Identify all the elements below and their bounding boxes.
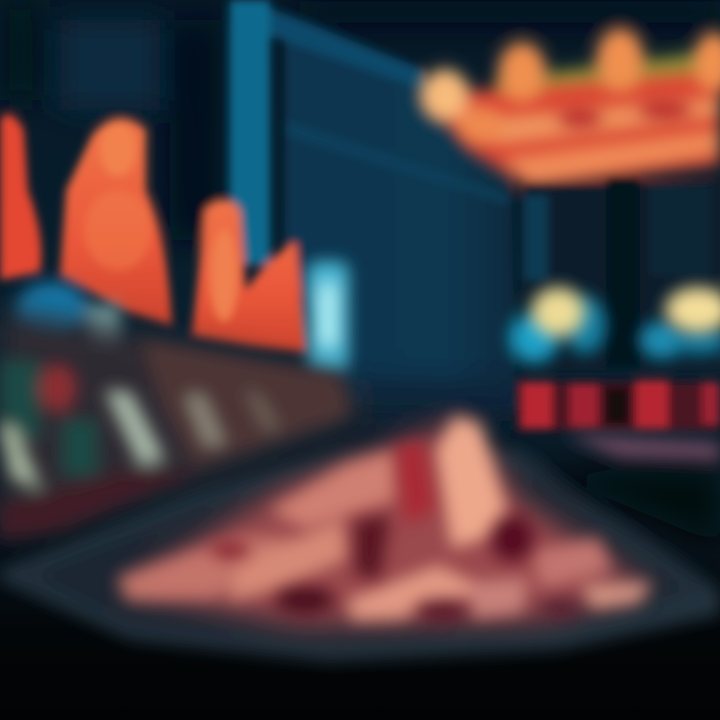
machine base [565,434,720,464]
back wall panel [285,34,515,410]
right floor shadow [540,470,720,545]
marquee bulbs [421,28,720,143]
red reels [518,380,720,430]
wall fading base [350,380,515,430]
red flame towers [0,114,306,352]
marquee crown [425,50,720,188]
chip highlights [118,416,652,620]
table inner [30,462,690,646]
machine cabinet right [522,175,720,370]
glowing screens [510,297,720,362]
upper background bands [0,0,720,240]
machine details [0,340,350,540]
blue pillar [230,0,510,265]
glowing light by wall [308,262,348,372]
row of machines left [0,310,360,530]
blue machine top [16,282,120,355]
chip pile [120,420,650,625]
chip shadows [210,440,580,620]
table rim [0,450,720,662]
screen highlights [532,288,720,336]
